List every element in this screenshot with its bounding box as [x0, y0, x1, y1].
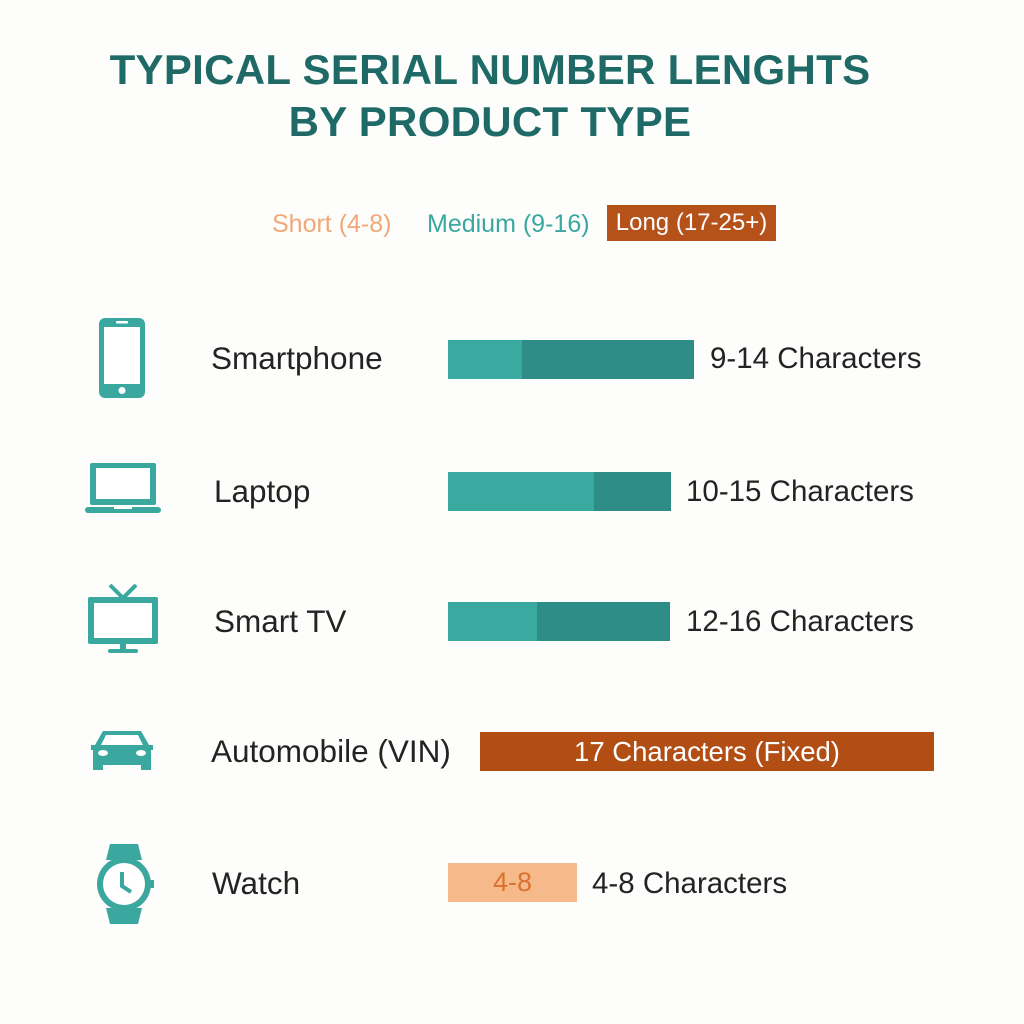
value: 12-16 Characters: [686, 605, 914, 638]
title: BY PRODUCT TYPE: [289, 98, 691, 145]
label: Smartphone: [211, 340, 383, 376]
row: automobile: [91, 731, 934, 771]
row: smart tv: [88, 584, 914, 653]
title: [110, 46, 870, 145]
value: 10-15 Characters: [686, 475, 914, 508]
legend: long: [607, 205, 776, 241]
icon: watch: [97, 844, 154, 924]
legend: medium: Medium (9-16): [427, 210, 590, 238]
icon: laptop: [85, 463, 161, 513]
label: Laptop: [214, 473, 310, 509]
icon: car: [91, 731, 153, 770]
legend: [272, 205, 776, 241]
legend: long: Long (17-25+): [616, 209, 767, 236]
value: 9-14 Characters: [710, 342, 922, 375]
row: laptop: [85, 463, 914, 513]
row: smartphone: [99, 318, 922, 398]
icon: tv: [88, 584, 158, 653]
icon: smartphone: [99, 318, 145, 398]
label: Smart TV: [214, 603, 346, 639]
bar with value: 17 Characters (Fixed): [574, 736, 840, 767]
legend: short: Short (4-8): [272, 210, 391, 238]
bar: [448, 340, 522, 379]
bar with value: [480, 732, 934, 771]
bar: [448, 472, 594, 511]
bar: 4-8: [493, 867, 532, 897]
bar: [448, 602, 537, 641]
value: 4-8 Characters: [592, 867, 787, 900]
label: Watch: [212, 865, 300, 901]
bar: [448, 863, 577, 902]
label: Automobile (VIN): [211, 733, 451, 769]
row: watch: [97, 844, 787, 924]
title: TYPICAL SERIAL NUMBER LENGHTS: [110, 46, 870, 93]
